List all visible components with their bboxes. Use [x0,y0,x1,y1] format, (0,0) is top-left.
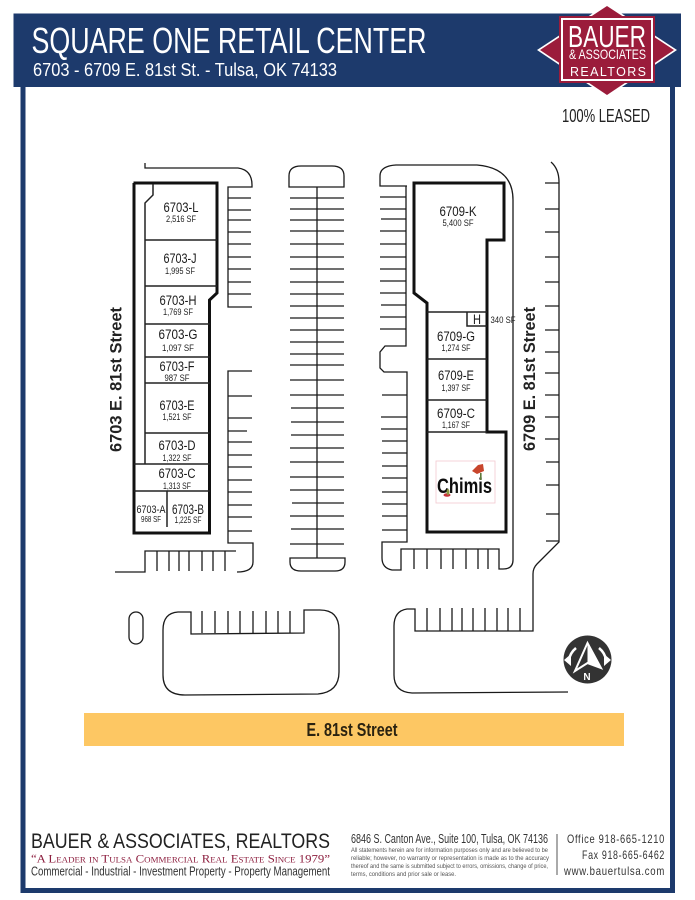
disclaimer: All statements herein are for information purposes only and are believed to be [351,847,548,854]
contact details: Fax 918-665-6462 [582,848,665,862]
site plan: east parking and drives [380,165,513,570]
unit 6709-G: 1,274 SF [442,343,471,353]
unit 6703-E: 1,521 SF [162,412,192,422]
unit 6703-A [136,504,166,524]
disclaimer [351,847,550,878]
address subtitle: 6703 - 6709 E. 81st St. - Tulsa, OK 74133 [33,60,337,80]
unit 6709-K [440,204,476,228]
disclaimer: reliable; however, no warranty or representation is made as to the accuracy [351,855,550,862]
unit 6703-L [164,200,199,224]
unit 6709-K: 5,400 SF [442,218,474,228]
unit 6709-K: 6709-K [440,204,476,219]
unit 6703-G: 6703-G [158,327,198,342]
header banner [14,14,681,87]
footer [31,830,665,878]
unit 6703-G [158,327,198,353]
services: Commercial - Industrial - Investment Property - Property Management [31,864,330,878]
building: 6703 [134,183,217,533]
site plan: west parking [115,163,253,572]
logo: Bauer and Associates: & ASSOCIATES [569,46,646,62]
unit 6703-J [164,251,196,276]
unit 6703-J: 6703-J [164,251,196,266]
unit 6709-C: 1,167 SF [442,420,470,430]
unit 6703-J: 1,995 SF [165,266,195,276]
logo: Bauer and Associates: REALTORS [570,65,646,79]
unit 6709-C [437,406,475,430]
unit 6709-G: 6709-G [437,329,475,344]
building: 6709 [414,183,516,532]
street label: 6709: 6709 E. 81st Street [520,307,539,451]
unit 6703-F [160,359,194,383]
contact details: www.bauertulsa.com [563,864,665,878]
road: E. 81st Street [84,713,624,746]
unit 6703-A: 968 SF [141,515,161,524]
site plan: south parking island [129,610,339,695]
unit 6703-F: 6703-F [160,359,194,374]
unit 6703-C: 6703-C [158,466,196,481]
tagline: “A Leader in Tulsa Commercial Real Estate Since 1979” [31,854,330,866]
unit 6703-D [158,438,196,463]
street label: 6703: 6703 E. 81st Street [106,307,126,452]
site plan: east curb and stalls [394,162,568,693]
office address: 6846 S. Canton Ave., Suite 100, Tulsa, OK 74136 [351,832,548,846]
unit 6709-H: H [473,312,481,327]
unit 6703-C: 1,313 SF [163,481,191,491]
unit 6703-A: 6703-A [136,504,166,516]
unit 6703-L: 6703-L [164,200,199,215]
unit 6709-E [438,368,474,393]
unit 6703-D: 6703-D [158,438,196,453]
contact details: Office 918-665-1210 [567,832,665,846]
contact details [563,832,665,878]
site plan: center parking [289,166,345,571]
unit 6703-H [160,293,196,317]
unit 6703-H: 6703-H [160,293,196,308]
unit 6709-H [473,312,516,327]
company name: BAUER & ASSOCIATES, REALTORS [31,830,330,853]
disclaimer: thereof and the same is submitted subject to errors, omissions, change of price, [351,863,548,870]
unit 6703-B: 6703-B [172,502,204,517]
icon: north compass: N [583,672,591,683]
unit 6703-D: 1,322 SF [162,453,192,463]
unit 6703-F: 987 SF [164,373,190,383]
logo: Chimis [436,461,495,503]
unit 6709-H: 340 SF [490,315,516,325]
unit 6709-G [437,329,475,353]
logo: Chimis: Chimis [437,475,492,498]
unit 6709-E: 6709-E [438,368,474,383]
leased status: 100% LEASED [562,106,650,126]
logo: Bauer and Associates [537,4,677,97]
unit 6703-E: 6703-E [160,398,194,413]
title: SQUARE ONE RETAIL CENTER [32,20,426,61]
unit 6703-E [160,398,194,422]
road: E. 81st Street: E. 81st Street [306,720,398,740]
unit 6703-L: 2,516 SF [166,214,196,224]
unit 6709-E: 1,397 SF [442,383,471,393]
unit 6703-C [158,466,196,491]
unit 6703-B [172,502,204,525]
unit 6709-C: 6709-C [437,406,475,421]
icon: north compass [564,636,612,684]
unit 6703-H: 1,769 SF [163,307,193,317]
disclaimer: terms, conditions and prior sale or lease. [351,871,456,878]
unit 6703-B: 1,225 SF [174,515,202,525]
logo: Bauer and Associates: BAUER [568,19,646,54]
unit 6703-G: 1,097 SF [162,343,194,353]
